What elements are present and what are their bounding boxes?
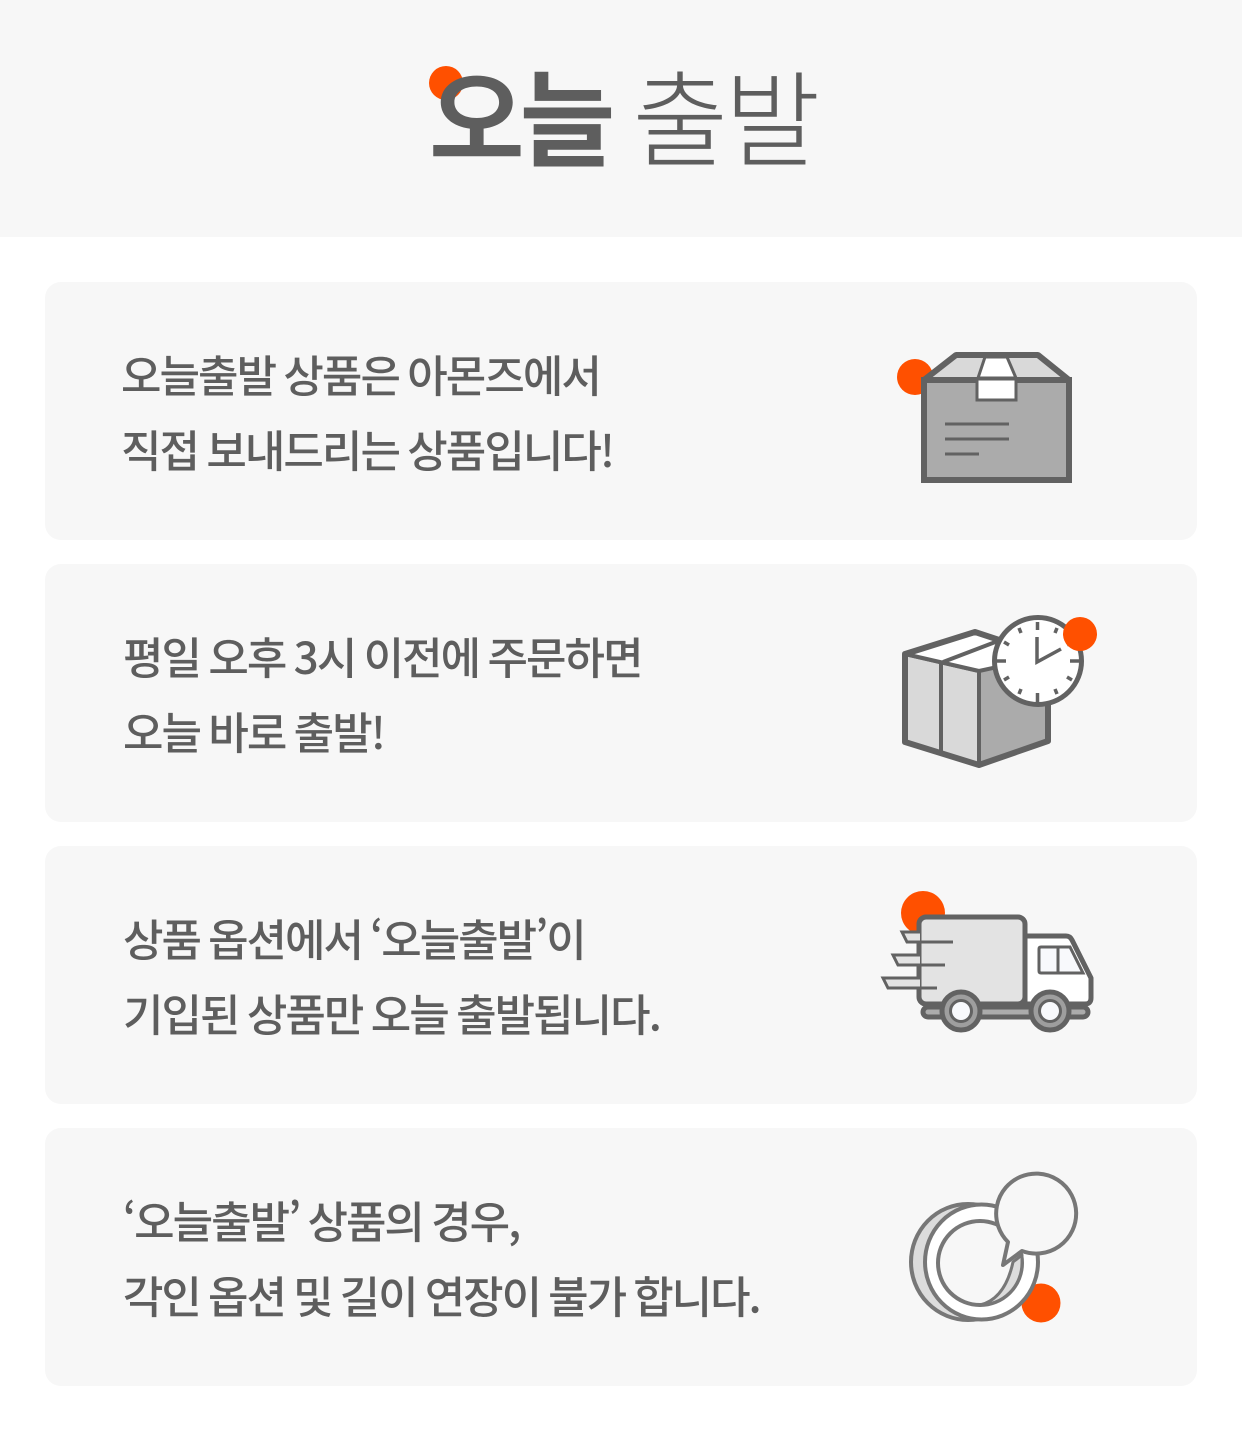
text block: option selection [123, 905, 660, 1044]
text block: option selection: 상품 옵션에서 ‘오늘출발’이 [123, 905, 585, 969]
text block: engraving notice [123, 1187, 760, 1326]
text block: direct shipping: 직접 보내드리는 상품입니다! [121, 416, 613, 480]
orange accent dot [429, 66, 463, 100]
text block: direct shipping: 오늘출발 상품은 아몬즈에서 [121, 353, 600, 402]
text block: weekday cutoff: 평일 오후 3시 이전에 주문하면 [123, 623, 642, 687]
icon: delivery truck [883, 891, 1091, 1030]
icon: parcel box [897, 355, 1069, 480]
icon: box with clock [905, 617, 1097, 765]
text block: option selection: 기입된 상품만 오늘 출발됩니다. [123, 980, 660, 1044]
text block: engraving notice: 각인 옵션 및 길이 연장이 불가 합니다. [123, 1262, 760, 1326]
header band [0, 0, 1242, 237]
panel: direct shipping [45, 282, 1197, 540]
icon: ring with speech bubble [911, 1174, 1076, 1322]
title: 오늘출발 [429, 65, 817, 181]
panel: weekday cutoff [45, 564, 1197, 822]
text block: weekday cutoff [123, 623, 642, 762]
panel: engraving notice [45, 1128, 1197, 1386]
text block: weekday cutoff: 오늘 바로 출발! [123, 698, 384, 762]
panel: option selection [45, 846, 1197, 1104]
text block: engraving notice: ‘오늘출발’ 상품의 경우, [123, 1187, 519, 1251]
text block: direct shipping [121, 353, 613, 480]
